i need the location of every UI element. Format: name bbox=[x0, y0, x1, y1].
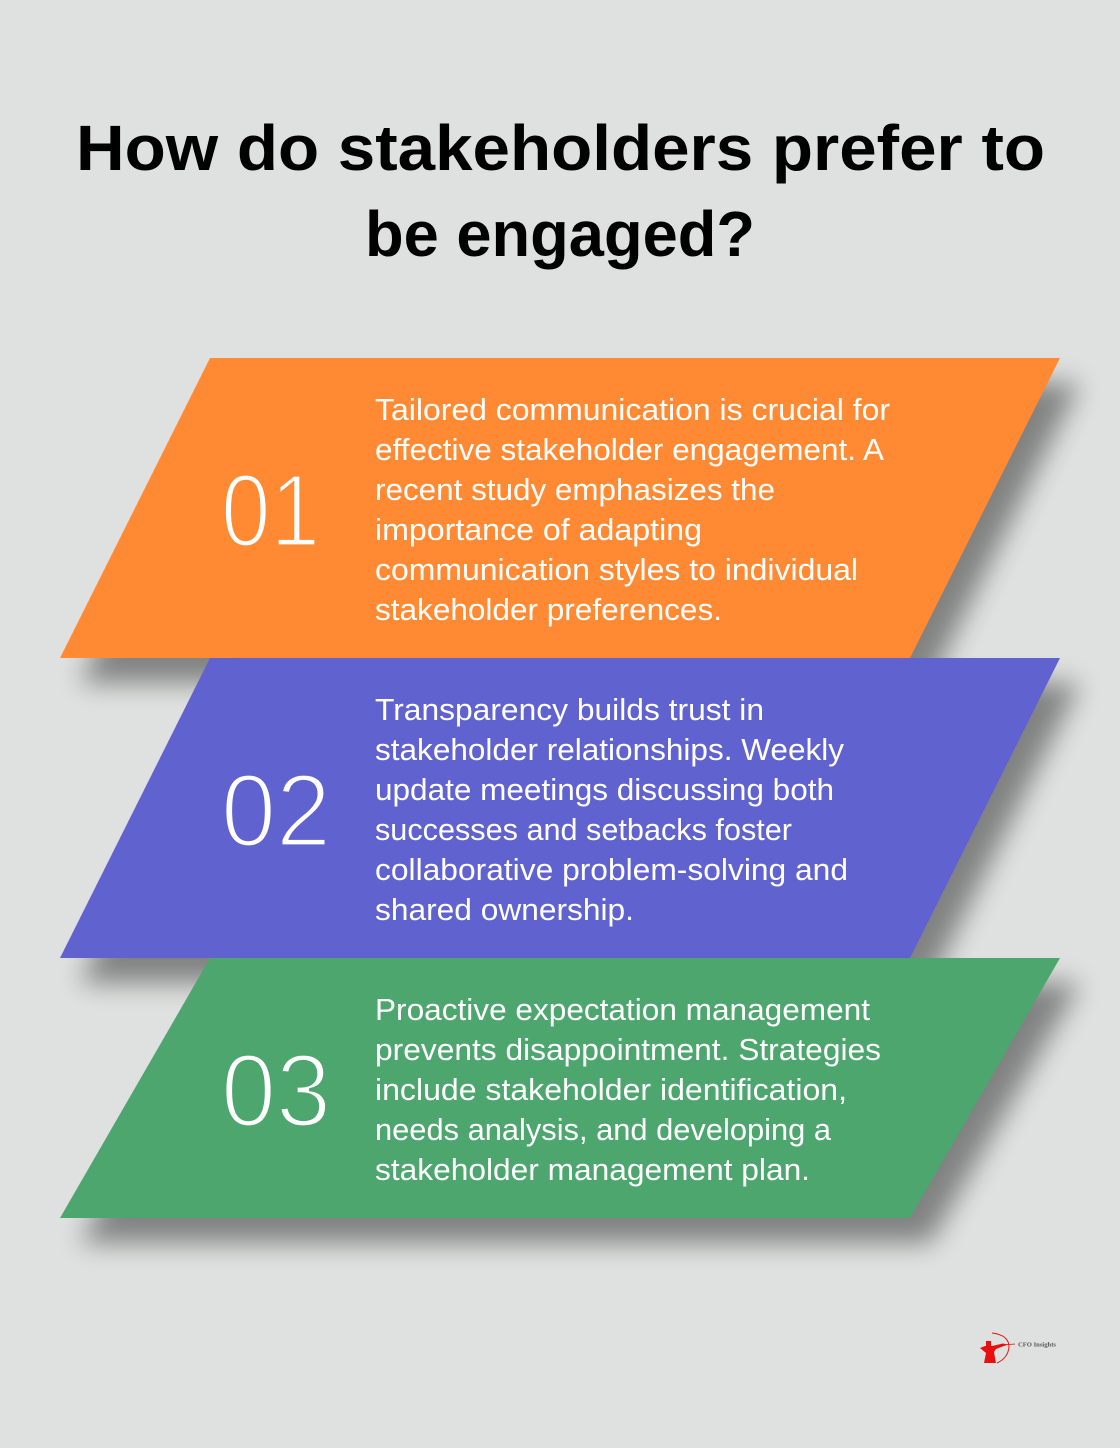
title: How do stakeholders prefer to bbox=[76, 112, 1045, 184]
text block 01: Tailored communication is crucial for bbox=[375, 392, 890, 427]
text block 03: Proactive expectation management bbox=[375, 992, 870, 1027]
text block 01: communication styles to individual bbox=[375, 552, 858, 587]
logo text: CFO Insights bbox=[1018, 1342, 1057, 1348]
text block 03: prevents disappointment. Strategies bbox=[375, 1032, 881, 1067]
text block 02 bbox=[375, 692, 848, 927]
text block 01: effective stakeholder engagement. A bbox=[375, 432, 884, 467]
text block 03: include stakeholder identification, bbox=[375, 1072, 847, 1107]
text block 02: successes and setbacks foster bbox=[375, 812, 792, 847]
text block 01: stakeholder preferences. bbox=[375, 592, 722, 627]
title: be engaged? bbox=[365, 198, 755, 270]
text block 03: needs analysis, and developing a bbox=[375, 1112, 832, 1147]
panel: step 03 bbox=[60, 958, 1080, 1243]
icon: red archer bbox=[980, 1333, 1015, 1363]
text block 02: shared ownership. bbox=[375, 892, 634, 927]
number 02: 02 bbox=[221, 753, 331, 868]
number 01: 01 bbox=[221, 453, 320, 568]
green parallelogram bbox=[60, 958, 1060, 1218]
text block 01: importance of adapting bbox=[375, 512, 702, 547]
panel: step 02 bbox=[60, 658, 1080, 983]
logo: CFO Insights bbox=[980, 1333, 1057, 1363]
text block 02: collaborative problem-solving and bbox=[375, 852, 848, 887]
text block 03: stakeholder management plan. bbox=[375, 1152, 810, 1187]
text block 01 bbox=[375, 392, 890, 627]
text block 03 bbox=[375, 992, 881, 1187]
title bbox=[76, 112, 1045, 270]
panel: step 01 bbox=[60, 358, 1080, 683]
orange parallelogram bbox=[60, 358, 1060, 658]
text block 02: stakeholder relationships. Weekly bbox=[375, 732, 845, 767]
text block 02: Transparency builds trust in bbox=[375, 692, 764, 727]
purple parallelogram bbox=[60, 658, 1060, 958]
text block 02: update meetings discussing both bbox=[375, 772, 834, 807]
number 03: 03 bbox=[221, 1033, 331, 1148]
text block 01: recent study emphasizes the bbox=[375, 472, 775, 507]
